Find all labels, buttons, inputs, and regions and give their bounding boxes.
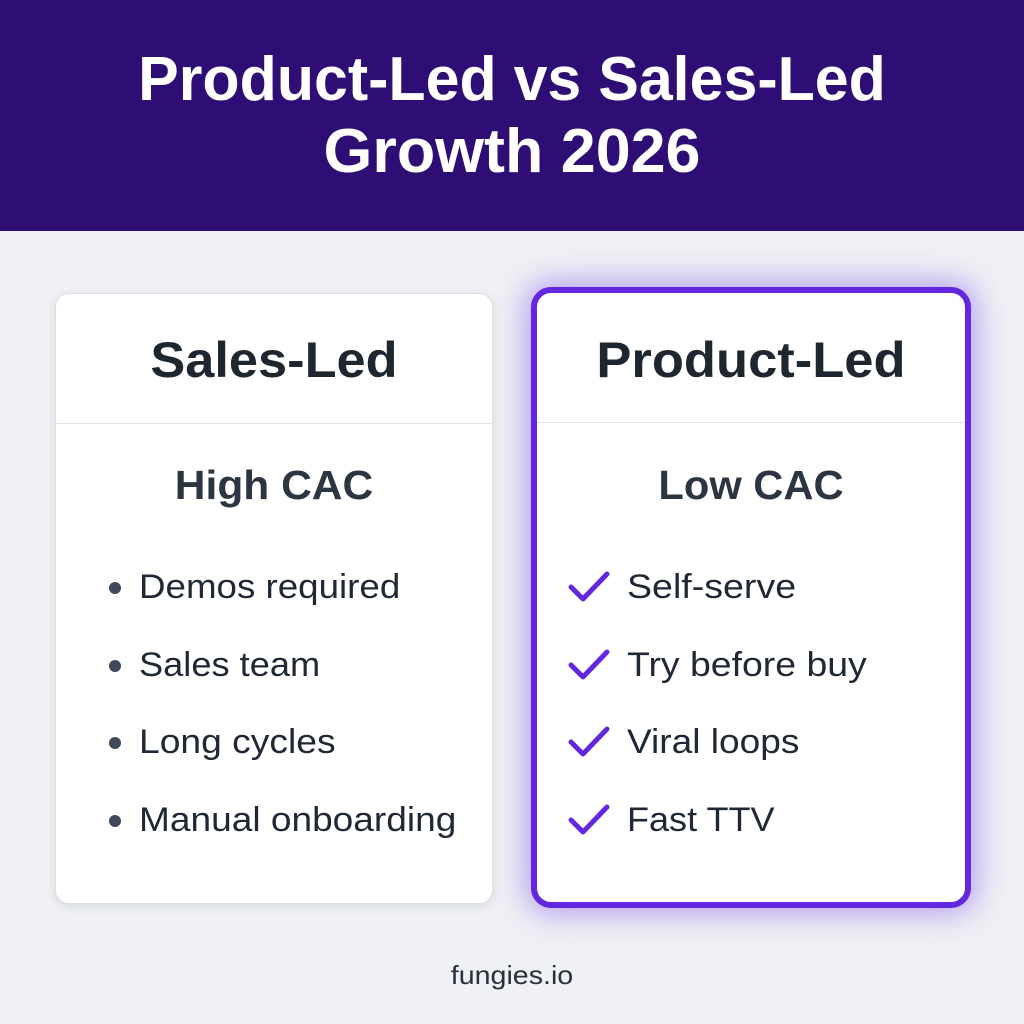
list: sales-led traits: Long cycles [139, 723, 336, 761]
list: sales-led traits: Sales team [139, 646, 320, 684]
list: product-led traits [568, 568, 867, 839]
list: sales-led traits: Demos required [139, 568, 400, 606]
title: Growth 2026 [324, 117, 700, 186]
list: product-led traits: Try before buy [627, 646, 867, 684]
title: Product-Led vs Sales-Led [138, 45, 886, 114]
heading: sales-led: Sales-Led [150, 332, 398, 388]
panel: sales-led [55, 293, 493, 904]
title [138, 45, 886, 186]
subheading: low CAC: Low CAC [658, 462, 844, 508]
header banner [0, 0, 1024, 231]
list: product-led traits: Fast TTV [627, 801, 775, 839]
footer brand: fungies.io [451, 960, 573, 990]
panel: product-led [531, 287, 971, 908]
list: product-led traits: Self-serve [627, 568, 796, 606]
list: product-led traits: Viral loops [627, 723, 799, 761]
subheading: high CAC: High CAC [175, 462, 373, 508]
list: sales-led traits [109, 568, 456, 839]
heading: product-led: Product-Led [596, 332, 906, 388]
list: sales-led traits: Manual onboarding [139, 801, 456, 839]
